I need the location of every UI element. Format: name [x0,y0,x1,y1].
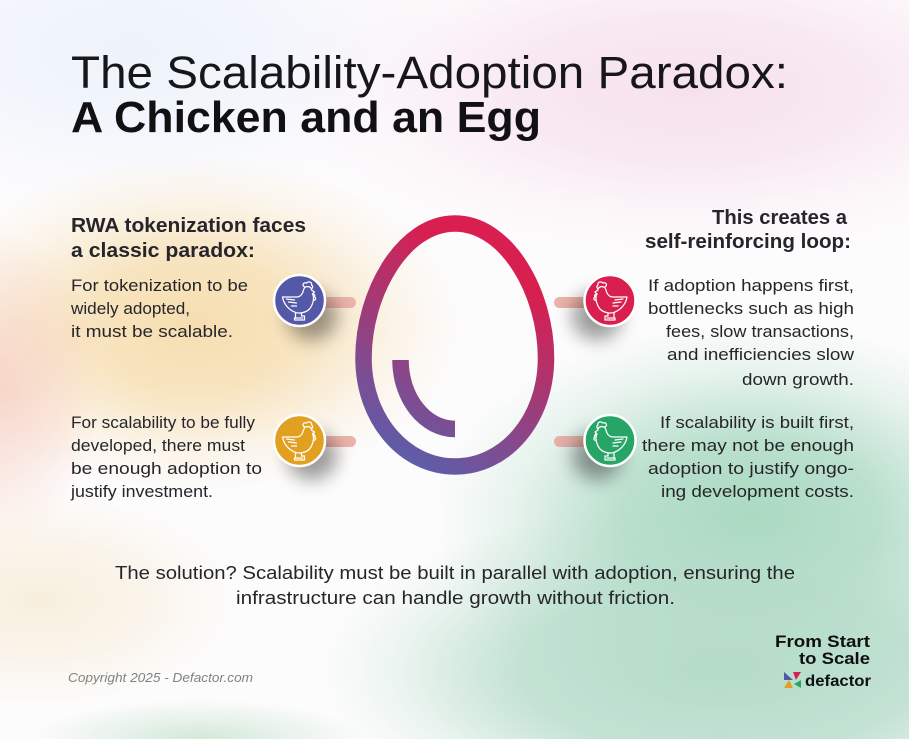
right text: scalability first: adoption to justify ongo- [648,459,854,478]
tagline: to Scale [799,649,870,668]
icon: red chicken [572,275,636,340]
right text: adoption first [648,276,855,389]
connector bar: top right [554,297,590,308]
left text: tokenization needs scalability: widely adopted, [70,299,190,318]
right text: adoption first: fees, slow transactions, [666,322,854,341]
right text: scalability first: ing development costs. [661,482,854,501]
logo: defactor [784,672,871,690]
left text: scalability needs adoption: developed, there must [71,436,245,455]
logo: defactor: defactor [805,673,871,690]
right text: scalability first: there may not be enough [642,436,854,455]
left text: tokenization needs scalability [70,276,248,341]
copyright: Copyright 2025 - Defactor.com [68,670,253,685]
left text: tokenization needs scalability: For tokenization to be [71,276,248,295]
left heading: classic paradox [71,215,306,262]
tagline [775,632,870,668]
title: The Scalability-Adoption Paradox: [71,47,788,98]
icon: orange chicken [274,415,337,480]
left text: tokenization needs scalability: it must be scalable. [71,322,233,341]
right text: adoption first: down growth. [742,370,854,389]
solution statement: The solution? Scalability must be built in parallel with adoption, ensuring the [115,563,795,583]
right heading: self-reinforcing loop: This creates a [712,207,848,229]
right text: scalability first: If scalability is built first, [660,413,854,432]
left heading: classic paradox: RWA tokenization faces [71,215,306,237]
tagline: From Start [775,632,870,651]
icon: green chicken [572,415,636,480]
icon: blue chicken [274,275,337,340]
left text: scalability needs adoption: justify investment. [70,482,213,501]
left text: scalability needs adoption: be enough adoption to [71,459,262,478]
solution statement: infrastructure can handle growth without friction. [236,588,675,608]
solution statement [115,563,795,608]
right heading: self-reinforcing loop [645,207,851,253]
right text: scalability first [642,413,854,501]
egg graphic [364,224,546,466]
left heading: classic paradox: a classic paradox: [71,240,255,262]
right text: adoption first: bottlenecks such as high [648,299,854,318]
right heading: self-reinforcing loop: self-reinforcing loop: [645,231,851,253]
connector bar: top left [320,297,356,308]
left text: scalability needs adoption [70,413,262,501]
title: A Chicken and an Egg [71,93,541,142]
left text: scalability needs adoption: For scalability to be fully [71,413,256,432]
right text: adoption first: If adoption happens first, [648,276,854,295]
title [71,47,788,142]
right text: adoption first: and inefficiencies slow [667,345,855,364]
connector bar: bottom left [320,436,356,447]
connector bar: bottom right [554,436,590,447]
